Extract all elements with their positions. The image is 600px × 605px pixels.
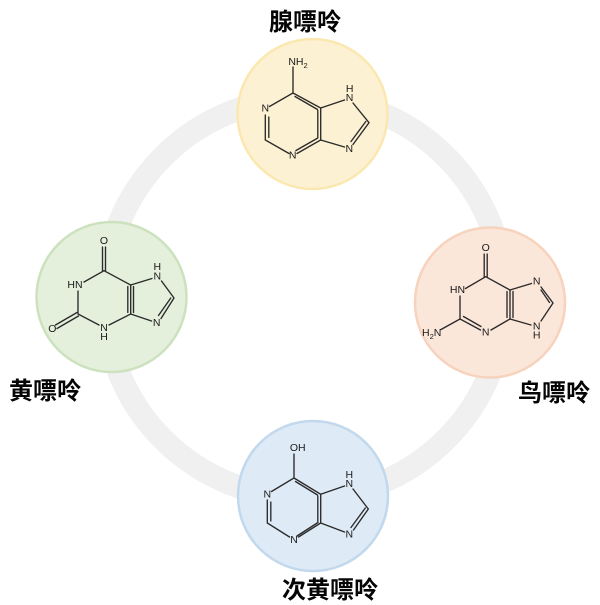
hypoxanthine circle bbox=[238, 421, 388, 571]
heading: xanthine label: 黄嘌呤 bbox=[9, 378, 81, 405]
xanthine circle bbox=[36, 222, 186, 372]
guanine atom labels: N bbox=[533, 321, 540, 333]
guanine atom labels bbox=[422, 242, 540, 342]
xanthine atom labels bbox=[48, 235, 161, 343]
xanthine atom labels: H bbox=[100, 331, 108, 343]
panel: adenine bbox=[238, 39, 388, 189]
hypoxanthine atom labels: N bbox=[264, 488, 271, 500]
guanine atom labels: H bbox=[533, 330, 540, 342]
heading: guanine label: 鸟嘌呤 bbox=[518, 380, 590, 407]
hypoxanthine structure bbox=[267, 454, 368, 537]
guanine structure bbox=[441, 254, 553, 330]
xanthine atom labels: N bbox=[154, 271, 161, 283]
guanine atom labels: H bbox=[422, 327, 430, 339]
guanine atom labels: N bbox=[482, 327, 489, 339]
hypoxanthine atom labels: OH bbox=[290, 442, 306, 454]
hypoxanthine atom labels: N bbox=[346, 528, 353, 540]
adenine atom labels: N bbox=[346, 143, 353, 155]
xanthine atom labels: O bbox=[48, 323, 56, 335]
adenine structure bbox=[265, 67, 369, 154]
heading: hypoxanthine label: 次黄嘌呤 bbox=[282, 577, 378, 604]
guanine atom labels: 2 bbox=[430, 332, 434, 340]
panel: hypoxanthine bbox=[238, 421, 388, 571]
panel: guanine bbox=[415, 228, 565, 378]
adenine atom labels bbox=[262, 56, 353, 162]
hypoxanthine atom labels: H bbox=[346, 469, 353, 481]
guanine atom labels: O bbox=[482, 242, 490, 254]
guanine circle bbox=[415, 228, 565, 378]
hypoxanthine atom labels bbox=[264, 442, 353, 546]
guanine atom labels: HN bbox=[450, 284, 465, 296]
adenine atom labels: NH bbox=[288, 56, 304, 68]
hypoxanthine atom labels: N bbox=[290, 534, 298, 546]
adenine atom labels: N bbox=[346, 92, 353, 104]
adenine atom labels: N bbox=[262, 103, 269, 115]
xanthine atom labels: H bbox=[154, 261, 161, 273]
adenine atom labels: 2 bbox=[304, 60, 308, 70]
grey cycle ring bbox=[104, 98, 504, 498]
xanthine atom labels: O bbox=[100, 235, 108, 247]
xanthine atom labels: N bbox=[153, 317, 160, 329]
xanthine atom labels: N bbox=[100, 322, 108, 334]
adenine circle bbox=[238, 39, 388, 189]
adenine atom labels: N bbox=[289, 150, 296, 162]
adenine atom labels: H bbox=[346, 83, 353, 95]
guanine atom labels: N bbox=[434, 327, 441, 339]
xanthine atom labels: HN bbox=[67, 279, 83, 291]
xanthine structure bbox=[56, 247, 174, 328]
guanine atom labels: N bbox=[533, 276, 540, 288]
heading: adenine label: 腺嘌呤 bbox=[269, 9, 341, 36]
panel: xanthine bbox=[36, 222, 186, 372]
hypoxanthine atom labels: N bbox=[346, 478, 353, 490]
